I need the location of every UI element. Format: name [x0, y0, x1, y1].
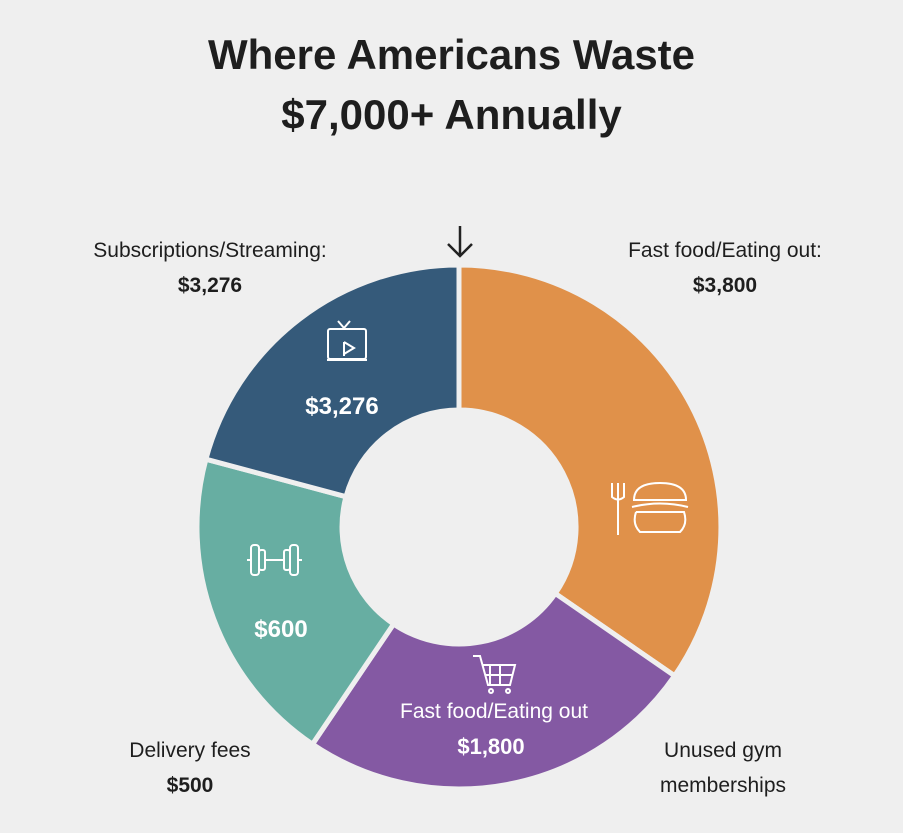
segment: purple — [312, 594, 675, 789]
icon: tv — [327, 321, 367, 360]
value: 600: $600 — [254, 616, 308, 643]
arrow — [447, 226, 473, 258]
icon: dumbbell — [247, 545, 302, 575]
icon: cart — [473, 656, 515, 693]
donut chart: $1,800 — [457, 734, 525, 759]
label: fast food: $3,800 — [693, 274, 757, 297]
label: subscriptions — [93, 239, 327, 297]
value: purple label: Fast food/Eating out — [400, 700, 588, 723]
label: subscriptions: $3,276 — [178, 274, 242, 297]
label: delivery fees: $500 — [167, 774, 213, 797]
value: 3276: $3,276 — [305, 393, 379, 420]
label: gym: memberships — [660, 774, 786, 797]
label: gym: Unused gym — [664, 739, 782, 762]
label: fast food — [628, 239, 822, 297]
icon: fork burger — [612, 483, 688, 535]
segment: blue — [206, 265, 459, 497]
title: $7,000+ Annually — [281, 91, 622, 138]
title — [208, 31, 695, 138]
segment: teal — [197, 459, 394, 744]
label: delivery fees: Delivery fees — [129, 739, 251, 762]
title: Where Americans Waste — [208, 31, 695, 78]
label: delivery fees — [129, 739, 251, 797]
label: subscriptions: Subscriptions/Streaming: — [93, 239, 327, 262]
label: fast food: Fast food/Eating out: — [628, 239, 822, 262]
segment: fast food — [459, 265, 721, 676]
label: gym — [660, 739, 786, 797]
